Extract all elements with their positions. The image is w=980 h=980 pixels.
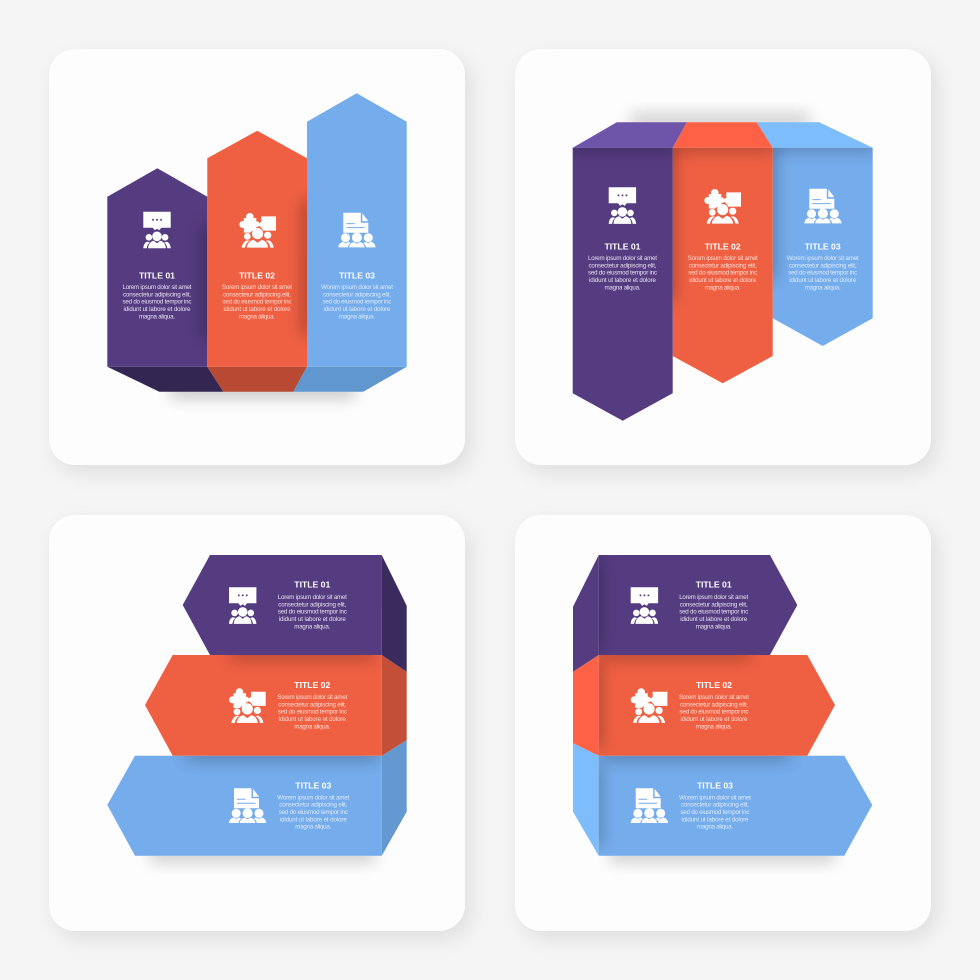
row: blue left arrow: ididunt ut labore et dolore — [280, 816, 347, 823]
column: purple down arrow: Lorem ipsum dolor sit amet — [588, 255, 657, 262]
row: blue right arrow: sed do eiusmod tempor inc — [680, 809, 750, 816]
column: blue down arrow: sed do eiusmod tempor inc — [788, 270, 857, 277]
column: orange down arrow: TITLE 02 — [705, 241, 741, 251]
column: purple down arrow: sed do eiusmod tempor inc — [588, 270, 657, 277]
row: purple right arrow: TITLE 01 — [696, 580, 732, 590]
row: orange left arrow: magna aliqua. — [294, 723, 331, 730]
column: purple down arrow: consectetur adipiscing elit, — [588, 262, 657, 269]
column: orange down arrow: sed do eiusmod tempor inc — [688, 270, 757, 277]
row: purple right arrow: consectetur adipiscing elit, — [680, 601, 748, 608]
row: blue right arrow: magna aliqua. — [697, 824, 733, 831]
row: blue left arrow: consectetur adipiscing elit, — [279, 802, 348, 809]
column: blue down arrow: ididunt ut labore et dolore — [789, 277, 857, 284]
column: orange up arrow: TITLE 02 — [239, 270, 275, 280]
column: blue up arrow: magna aliqua. — [339, 313, 375, 320]
column: orange up arrow: Sorem ipsum dolor sit amet — [222, 284, 292, 291]
row: blue right arrow: Worem ipsum dolor sit amet — [679, 794, 751, 801]
row: blue left arrow: TITLE 03 — [295, 780, 331, 790]
row: purple right arrow: magna aliqua. — [696, 623, 732, 630]
column: blue down arrow: magna aliqua. — [805, 284, 841, 291]
row: blue right arrow: TITLE 03 — [697, 780, 733, 790]
row: purple left arrow: consectetur adipiscing elit, — [278, 601, 347, 608]
panel: left-pointing arrows — [49, 515, 471, 939]
column: purple up arrow — [107, 168, 223, 392]
column: blue up arrow: ididunt ut labore et dolore — [324, 306, 391, 313]
column: orange up arrow: ididunt ut labore et dolore — [224, 306, 291, 313]
row: purple right arrow: ididunt ut labore et dolore — [680, 616, 748, 623]
column: orange up arrow: magna aliqua. — [239, 313, 275, 320]
row: orange left arrow: consectetur adipiscing elit, — [278, 701, 347, 708]
column: orange up arrow — [207, 131, 315, 392]
row: orange right arrow: TITLE 02 — [696, 680, 732, 690]
column: orange up arrow: sed do eiusmod tempor inc — [222, 299, 292, 306]
column: orange down arrow — [672, 122, 773, 384]
row: purple left arrow: Lorem ipsum dolor sit amet — [278, 594, 347, 601]
column: orange down arrow: magna aliqua. — [705, 284, 741, 291]
column: purple down arrow: TITLE 01 — [604, 241, 641, 251]
column: purple up arrow: sed do eiusmod tempor inc — [122, 299, 192, 306]
row: blue right arrow — [573, 743, 872, 856]
column: orange down arrow: consectetur adipiscing elit, — [689, 262, 757, 269]
row: blue left arrow — [107, 740, 407, 856]
column: purple down arrow: ididunt ut labore et dolore — [589, 277, 657, 284]
row: blue left arrow: magna aliqua. — [295, 824, 332, 831]
row: orange right arrow: ididunt ut labore et dolore — [680, 716, 748, 723]
column: purple up arrow: ididunt ut labore et dolore — [124, 306, 191, 313]
row: purple right arrow: Lorem ipsum dolor sit amet — [679, 594, 748, 601]
column: purple down arrow — [570, 122, 687, 421]
row: blue left arrow: sed do eiusmod tempor inc — [279, 809, 348, 816]
column: blue down arrow: TITLE 03 — [805, 241, 841, 251]
row: blue left arrow: Worem ipsum dolor sit amet — [277, 794, 350, 801]
column: orange down arrow: ididunt ut labore et dolore — [689, 277, 757, 284]
row: orange left arrow — [145, 647, 407, 756]
column: blue down arrow: Worem ipsum dolor sit amet — [787, 255, 859, 262]
panel: right-pointing arrows — [515, 515, 937, 939]
column: blue up arrow: TITLE 03 — [339, 270, 375, 280]
column: purple up arrow: magna aliqua. — [139, 313, 175, 320]
column: blue up arrow: sed do eiusmod tempor inc — [322, 299, 392, 306]
row: orange right arrow: consectetur adipiscing elit, — [680, 701, 748, 708]
row: orange left arrow: Sorem ipsum dolor sit amet — [277, 694, 348, 701]
column: blue down arrow: consectetur adipiscing elit, — [789, 262, 857, 269]
column: purple up arrow: consectetur adipiscing elit, — [123, 291, 191, 298]
row: purple right arrow: sed do eiusmod tempor inc — [679, 609, 748, 616]
row: purple left arrow: ididunt ut labore et dolore — [279, 616, 346, 623]
row: orange right arrow: Sorem ipsum dolor sit amet — [679, 694, 749, 701]
row: purple left arrow: magna aliqua. — [294, 623, 331, 630]
column: orange up arrow: consectetur adipiscing elit, — [223, 291, 291, 298]
column: orange down arrow: Sorem ipsum dolor sit amet — [688, 255, 758, 262]
column: blue up arrow: consectetur adipiscing elit, — [323, 291, 391, 298]
row: orange right arrow: magna aliqua. — [696, 723, 732, 730]
row: blue right arrow: ididunt ut labore et dolore — [682, 816, 749, 823]
row: orange left arrow: TITLE 02 — [294, 680, 330, 690]
row: purple left arrow: TITLE 01 — [294, 580, 330, 590]
column: blue up arrow — [293, 93, 407, 392]
row: orange left arrow: ididunt ut labore et dolore — [279, 716, 346, 723]
row: purple left arrow: sed do eiusmod tempor inc — [278, 609, 347, 616]
panel: rising arrows — [49, 49, 471, 473]
column: purple up arrow: TITLE 01 — [139, 270, 175, 280]
column: blue down arrow — [757, 122, 875, 346]
panel: hanging arrows — [515, 49, 937, 473]
column: purple up arrow: Lorem ipsum dolor sit amet — [122, 284, 192, 291]
row: purple right arrow — [573, 555, 797, 672]
row: blue right arrow: consectetur adipiscing elit, — [681, 802, 749, 809]
row: purple left arrow — [183, 555, 407, 672]
row: orange right arrow: sed do eiusmod tempor inc — [680, 709, 748, 716]
column: purple down arrow: magna aliqua. — [604, 284, 641, 291]
column: blue up arrow: Worem ipsum dolor sit amet — [321, 284, 393, 291]
row: orange left arrow: sed do eiusmod tempor inc — [278, 709, 347, 716]
row: orange right arrow — [573, 647, 835, 756]
